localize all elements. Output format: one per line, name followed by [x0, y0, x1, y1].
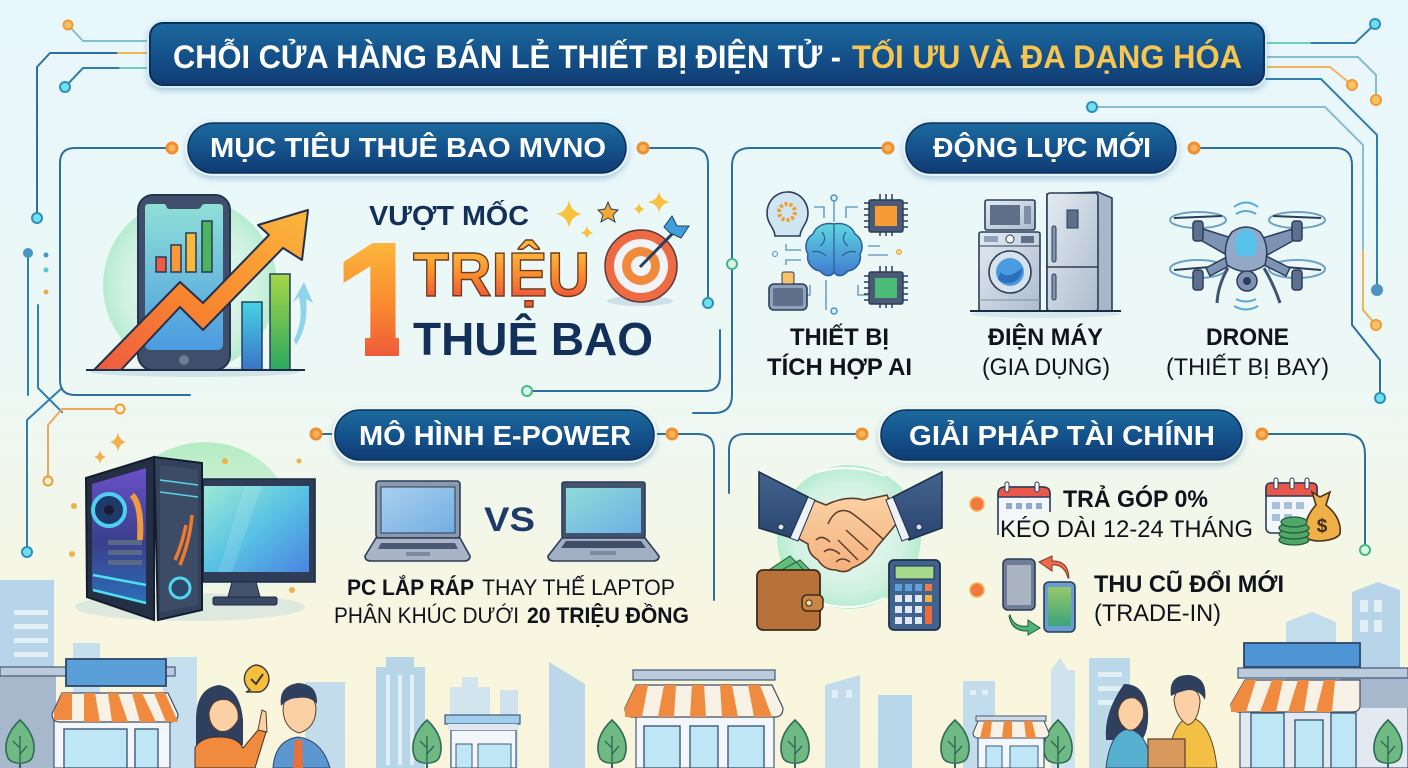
heading: financial solutions: GIẢI PHÁP TÀI CHÍNH: [909, 419, 1215, 451]
panel: new drivers: [767, 120, 1329, 381]
people: left couple: [195, 665, 330, 768]
bullet: installment: [970, 497, 984, 511]
heading: financial solutions: [878, 407, 1245, 463]
heading: new drivers: [903, 120, 1179, 176]
label: drone: (THIẾT BỊ BAY): [1166, 353, 1329, 381]
text: exceed milestone: VƯỢT MỐC: [369, 199, 529, 231]
panel: e-power model: [69, 407, 689, 628]
text: trade-in: [1094, 570, 1284, 627]
left store: [0, 659, 178, 768]
icon: AI devices: [767, 192, 908, 314]
text: e-power description: PC LẮP RÁP: [347, 575, 474, 600]
number: 1: 1: [334, 210, 424, 391]
title banner: CHỖI CỬA HÀNG BÁN LẺ THIẾT BỊ ĐIỆN TỬ -: [173, 39, 841, 75]
text: trade-in: (TRADE-IN): [1094, 600, 1221, 627]
label: home appliances: (GIA DỤNG): [982, 354, 1110, 381]
text: e-power description: 20 TRIỆU ĐỒNG: [527, 603, 689, 628]
text: zero percent installment: [1000, 484, 1253, 543]
heading: e-power: MÔ HÌNH E-POWER: [359, 419, 631, 451]
heading: MVNO target: [185, 120, 629, 176]
text: vs: VS: [484, 501, 535, 539]
text: million: TRIỆU: [413, 241, 590, 310]
text: zero percent installment: TRẢ GÓP 0%: [1063, 484, 1208, 513]
right store: [1231, 643, 1408, 768]
text: zero percent installment: KÉO DÀI 12-24 THÁNG: [1000, 516, 1253, 543]
text: e-power description: [334, 575, 689, 628]
icon: phone trade-in: [1003, 556, 1075, 635]
icon: calendar: [998, 482, 1050, 535]
icon: phone with growth arrow and bars: [86, 195, 313, 377]
circuit lines: [27, 24, 1380, 600]
small store: left: [413, 715, 520, 768]
label: drone: DRONE: [1206, 324, 1289, 351]
heading: MVNO target: MỤC TIÊU THUÊ BAO MVNO: [210, 132, 606, 163]
icon: handshake, wallet and calculator: [757, 465, 942, 630]
heading: new drivers: ĐỘNG LỰC MỚI: [933, 131, 1151, 163]
bullet: trade-in: [970, 583, 984, 597]
title banner: [147, 20, 1267, 88]
heading: e-power: [332, 407, 657, 463]
icon: calendar, coins and money bag: $: [1317, 516, 1328, 537]
circuit nodes: [22, 19, 1385, 557]
label: home appliances: ĐIỆN MÁY: [988, 323, 1103, 351]
icon: desktop PC and monitor: [69, 432, 315, 621]
icon: drone: [1170, 202, 1325, 310]
icon: stars: [556, 191, 670, 239]
panel: MVNO subscriber target: [86, 120, 689, 391]
label: AI devices: TÍCH HỢP AI: [767, 353, 912, 381]
text: trade-in: THU CŨ ĐỔI MỚI: [1094, 570, 1284, 598]
icon: home appliances: [970, 192, 1121, 318]
icon: laptop right: [548, 482, 659, 561]
icon: target with arrow: [605, 216, 689, 306]
people: right couple: [1106, 675, 1217, 768]
center store: [598, 670, 809, 768]
label: AI devices: [767, 323, 912, 381]
speech bubble: [244, 665, 269, 692]
text: e-power description: THAY THẾ LAPTOP: [482, 575, 675, 600]
small store: right: [941, 716, 1072, 768]
label: AI devices: THIẾT BỊ: [790, 323, 889, 351]
city skyline: [0, 580, 1400, 768]
icon: calendar, coins and money bag: [1266, 478, 1340, 545]
text: subscribers: THUÊ BAO: [413, 313, 653, 365]
title banner: TỐI ƯU VÀ ĐA DẠNG HÓA: [852, 39, 1242, 75]
icon: laptop left: [365, 481, 470, 561]
panel: financial solutions: [757, 407, 1340, 635]
label: drone: [1166, 324, 1329, 381]
text: e-power description: PHÂN KHÚC DƯỚI: [334, 603, 519, 628]
label: home appliances: [982, 323, 1110, 381]
